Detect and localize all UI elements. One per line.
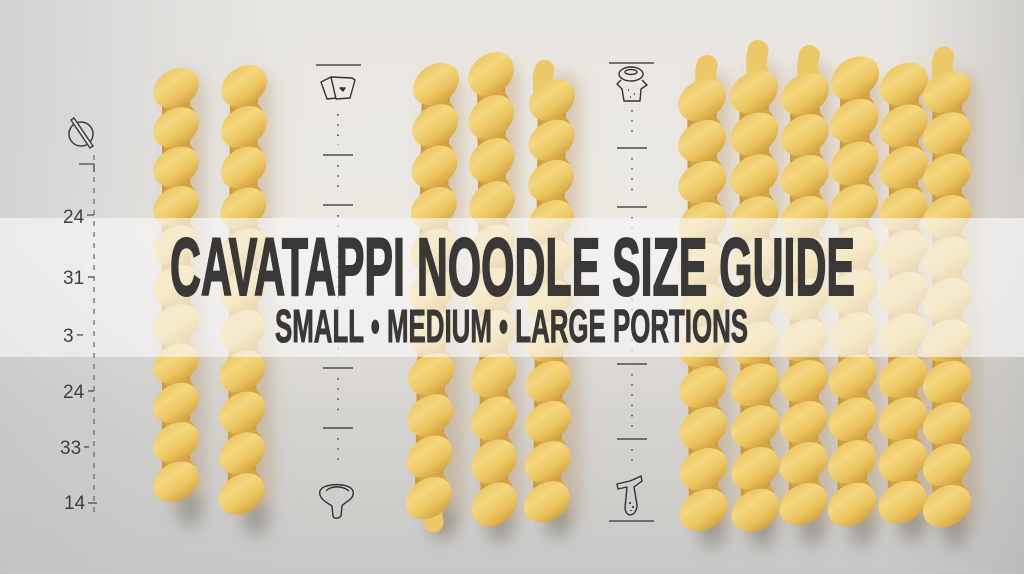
- noodle 5: [516, 70, 583, 531]
- noodle 7: [721, 50, 788, 540]
- ruler labels: 24: [63, 207, 85, 228]
- icon: spoon mushroom: [617, 476, 642, 515]
- ruler labels: 14: [64, 493, 86, 514]
- small noodles: [145, 57, 275, 523]
- noodle 6: [669, 65, 736, 540]
- ruler labels: 3: [63, 326, 74, 347]
- noodle 10: [870, 54, 937, 532]
- large noodles: [669, 47, 980, 540]
- ruler labels: [60, 207, 86, 514]
- noodle 3: [397, 54, 467, 528]
- noodle 9: [819, 47, 888, 535]
- noodle 8: [771, 55, 838, 534]
- translucent title band: [0, 218, 1024, 357]
- ruler labels: 33: [60, 438, 81, 459]
- noodle 1: [145, 60, 207, 510]
- ruler labels: 24: [63, 382, 85, 403]
- ruler labels: 31: [63, 268, 84, 289]
- noodle 4: [460, 43, 526, 536]
- noodle 2: [211, 57, 275, 523]
- right divider scale: [609, 63, 654, 521]
- left divider scale: [316, 65, 361, 518]
- medium noodles: [397, 43, 583, 536]
- noodle 11: [914, 57, 980, 536]
- noodle shadows: [186, 80, 960, 536]
- icon: hands top: [321, 77, 355, 99]
- icon: ring on stump: [617, 67, 647, 101]
- icon: plate and rolling pin: [69, 118, 93, 148]
- icon: bowl bottom: [320, 485, 353, 518]
- measurement ruler: [60, 118, 97, 514]
